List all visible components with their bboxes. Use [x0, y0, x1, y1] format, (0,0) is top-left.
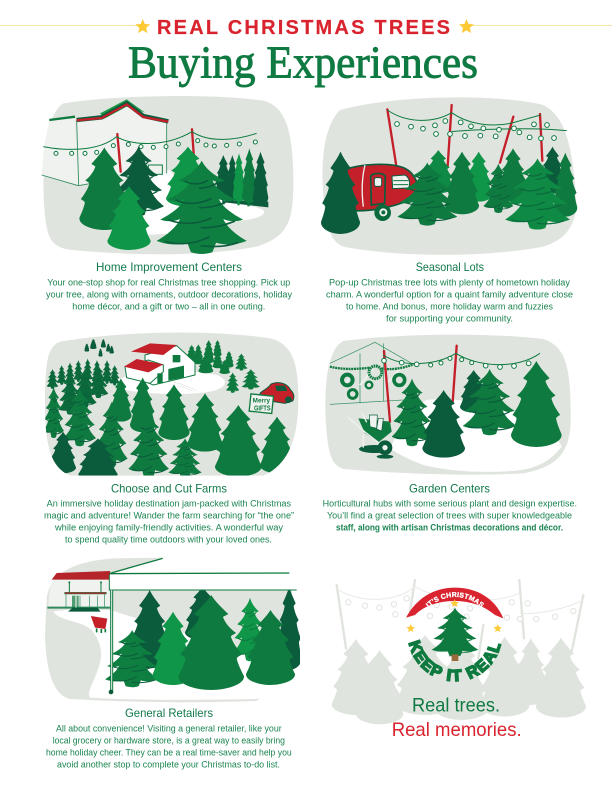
canopy — [109, 573, 297, 694]
store front — [47, 581, 110, 612]
wheelbarrow — [348, 412, 393, 459]
text: garden centers description: You’ll find a great selection of trees with super knowledgeable — [327, 511, 572, 521]
text: garden centers description: staff, along with artisan Christmas decorations and décor. — [336, 523, 563, 533]
heading: seasonal lots: Seasonal Lots — [416, 260, 484, 274]
illustration: store canopy and trees — [45, 558, 302, 702]
text: seasonal lots description: charm. A wonderful option for a quaint family adventure close — [326, 290, 573, 300]
text: seasonal lots description: to home. And bonus, more holiday warm and fuzzies — [346, 302, 554, 312]
logo: it's christmas keep it real — [406, 588, 504, 682]
illustration: trailer and trees — [321, 97, 577, 255]
heading: choose and cut farms: Choose and Cut Farms — [111, 482, 227, 496]
text: garden centers description: Horticultural hubs with some serious plant and design expertise. — [323, 499, 577, 509]
shopping cart — [91, 616, 107, 633]
illustration: store and trees — [42, 96, 293, 254]
text: farms description: An immersive holiday destination jam-packed with Christmas — [47, 499, 292, 509]
text: general retailers description: avoid another stop to complete your Christmas to-do list. — [57, 759, 280, 769]
heading: garden centers: Garden Centers — [409, 482, 490, 496]
illustration: farm and forest — [43, 332, 298, 480]
text: general retailers description — [46, 723, 292, 769]
heading: home improvement centers: Home Improvement Centers — [96, 260, 242, 274]
tagline: real trees: Real trees. — [412, 695, 500, 717]
small distant trees — [84, 339, 114, 357]
panel: home improvement centers — [42, 96, 293, 312]
text: home improvement description: your tree, along with ornaments, outdoor decorations, holiday — [46, 290, 293, 300]
panel: seasonal lots — [321, 97, 577, 324]
panel: garden centers — [323, 335, 577, 533]
illustration: greenhouse and wheelbarrow — [325, 335, 571, 475]
truck and sign: GIFTS — [254, 405, 271, 412]
text: farms description: magic and adventure! Wander the farm searching for “the one” — [44, 511, 294, 521]
text: seasonal lots description — [326, 278, 573, 324]
text: general retailers description: home holiday cheer. They can be a real time-saver and help you — [46, 747, 292, 757]
logo: it's christmas keep it real: IT’S CHRISTMAS — [425, 592, 484, 607]
text: seasonal lots description: Pop-up Christmas tree lots with plenty of hometown holiday — [329, 278, 571, 288]
greenhouse — [330, 342, 413, 404]
heading: general retailers: General Retailers — [125, 706, 213, 720]
foreground trees — [43, 377, 294, 478]
text: home improvement description — [46, 278, 293, 312]
panel: choose and cut farms — [43, 332, 298, 545]
header rule — [0, 24, 612, 26]
barn — [124, 343, 195, 385]
icon: right star — [459, 19, 474, 33]
text: farms description: while enjoying family-friendly activities. A wonderful way — [54, 523, 284, 533]
text: farms description: to spend quality time outdoors with your loved ones. — [65, 535, 272, 545]
text: garden centers description — [323, 499, 577, 533]
text: home improvement description: home décor, and a gift or two – all in one outing. — [72, 302, 265, 312]
text: general retailers description: All about convenience! Visiting a general retailer, like your — [56, 723, 282, 733]
logo: it's christmas keep it real: KEEP IT REAL — [408, 639, 502, 682]
eyebrow heading: REAL CHRISTMAS TREES — [157, 17, 450, 39]
back forest — [47, 358, 120, 415]
illustration: faded trees and logo — [332, 579, 586, 724]
truck and sign: Merry — [253, 397, 270, 404]
title: Buying Experiences — [128, 36, 478, 87]
faded background trees and lights — [332, 580, 586, 724]
trailer — [343, 164, 418, 221]
text: home improvement description: Your one-stop shop for real Christmas tree shopping. Pick up — [47, 278, 290, 288]
text: seasonal lots description: for supporting your community. — [386, 314, 513, 324]
panel: keep it real logo — [332, 579, 586, 741]
truck and sign — [249, 383, 294, 413]
icon: left star — [135, 19, 150, 33]
tagline: real memories: Real memories. — [392, 719, 522, 741]
text: farms description — [44, 499, 294, 545]
text: general retailers description: local grocery or hardware store, is a great way to easily bring — [53, 735, 285, 745]
panel: general retailers — [45, 558, 302, 769]
